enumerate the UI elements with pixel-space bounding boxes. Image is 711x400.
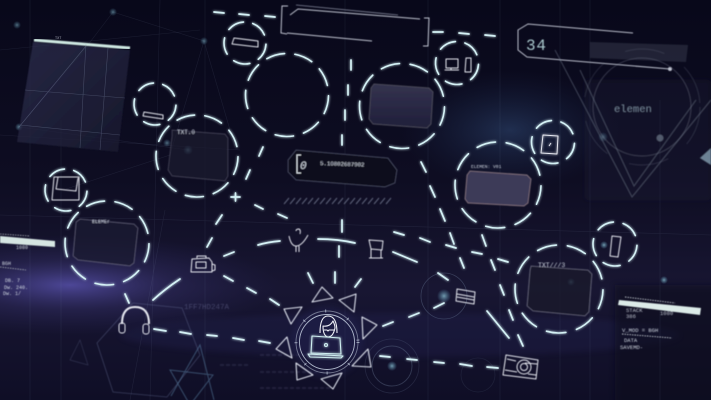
right data block: DATA [624,337,638,344]
icon: camcorder [191,256,215,272]
screen: element right: ELEMEN: V01 [471,164,502,170]
right data block: 386 [626,313,636,320]
cross marker [231,193,240,201]
right data block: V_MOD = BGH [622,327,658,334]
icon: monitor and tablet [445,58,471,72]
panel: top centre frame [281,5,429,46]
icon: card [456,289,475,304]
network circles [43,20,639,334]
icon: headphones [119,307,149,334]
screen: text 0: TXT.0 [177,129,195,136]
icon: slim panel [143,112,163,119]
panel: top left translucent screen [17,37,130,152]
person [320,316,337,337]
left data block: Dw. 1/ [3,291,21,297]
orbit triangles [276,287,377,389]
panel: data readout frame 34 [518,24,688,71]
screen: centre top [369,84,433,128]
screen: element right [465,164,531,206]
bottom left hexagon and faint text: 1FF7HD247A [184,304,230,312]
icon: hanging probe [289,229,308,252]
readout number: 34 [526,37,546,55]
value digit: 0 [300,161,307,173]
icon: small panel [232,38,258,47]
bottom left hexagon and faint text [70,303,330,400]
icon: phone [610,236,621,257]
screen: text 0 [168,129,228,181]
right data block: SAVEMD- [620,344,643,351]
panel: binary value frame [284,150,397,204]
icon: floppy window [52,177,79,200]
hub: user with laptop [276,287,377,389]
left data block [0,234,55,297]
right data block [618,297,701,351]
icon: tablet [541,135,558,154]
icon: server terminal [369,240,383,258]
icon: photo camera [503,355,538,379]
screen: element left [73,219,138,266]
value number: 5.10802687902 [320,160,365,169]
screen: text 3: TXT///3 [538,262,565,269]
right data block: STACK [626,307,643,314]
laptop [308,336,343,358]
left data block: Dw. 240. [4,285,28,291]
left data block: 1080 [16,245,28,251]
screen: element left: ELEMEr [92,219,110,225]
network connector dashes [125,12,523,368]
screen: text 3 [527,262,592,316]
rings [296,311,358,373]
right data block: 1080 [660,310,673,317]
left data block: BGH [2,261,11,267]
left data block: DB. 7 [5,278,20,284]
panel: element hud [555,49,711,200]
panel: element hud: elemen [614,104,652,116]
panel: top left translucent screen: TXT [55,37,61,41]
